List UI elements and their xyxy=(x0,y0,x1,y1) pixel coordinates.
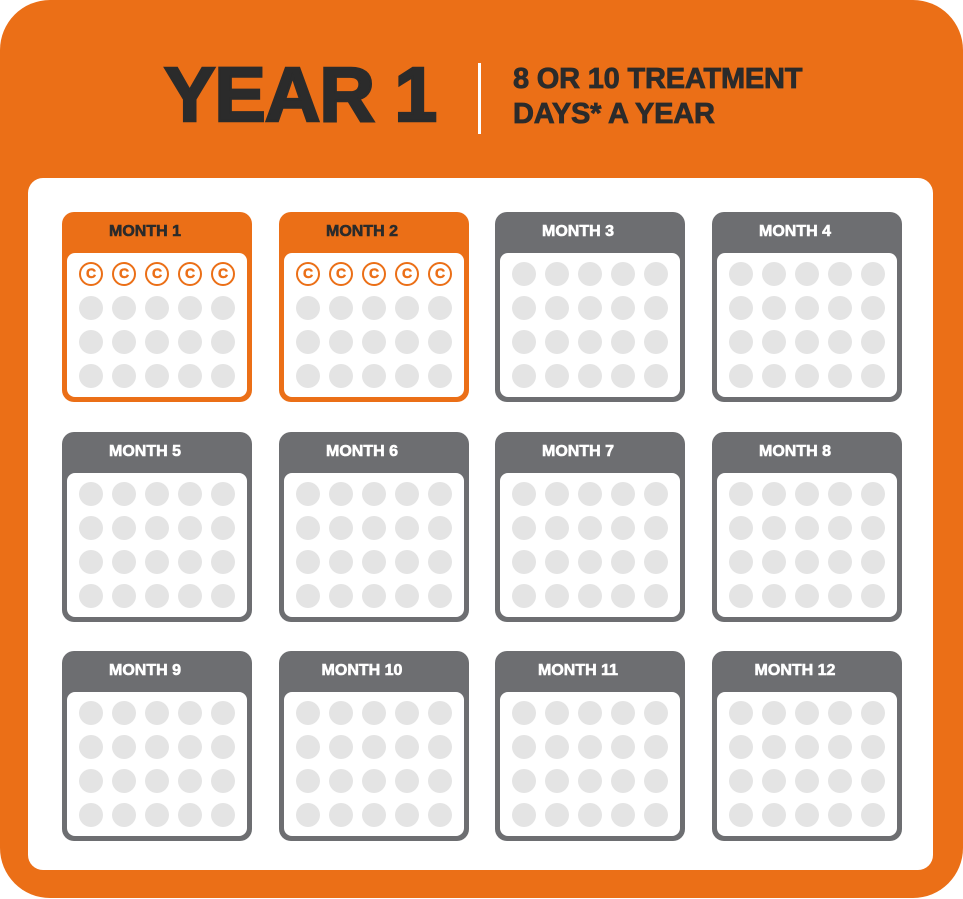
month 3 xyxy=(495,212,685,402)
month 9 xyxy=(62,651,252,841)
subtitle xyxy=(513,63,803,130)
month 2: C xyxy=(369,265,379,281)
month 10 xyxy=(279,651,469,841)
subtitle: DAYS* A YEAR xyxy=(513,98,715,130)
divider xyxy=(478,63,481,134)
month 11 xyxy=(495,651,685,841)
month 4 xyxy=(712,212,902,402)
month 2: MONTH 2 xyxy=(326,223,398,240)
month 2: C xyxy=(435,265,445,281)
month 6 xyxy=(279,432,469,622)
month 5 xyxy=(62,432,252,622)
month 2: C xyxy=(303,265,313,281)
month 4: MONTH 4 xyxy=(759,223,831,240)
month 6: MONTH 6 xyxy=(326,443,398,460)
month 8 xyxy=(712,432,902,622)
month 1: C xyxy=(185,265,195,281)
month 1 xyxy=(62,212,252,402)
month 7 xyxy=(495,432,685,622)
panel: calendar area xyxy=(28,178,933,870)
month 3: MONTH 3 xyxy=(542,223,614,240)
month 1: C xyxy=(218,265,228,281)
month 9: MONTH 9 xyxy=(109,662,181,679)
month 2 xyxy=(279,212,469,402)
month 8: MONTH 8 xyxy=(759,443,831,460)
month 2: C xyxy=(402,265,412,281)
subtitle: 8 OR 10 TREATMENT xyxy=(513,63,802,95)
month 1: C xyxy=(119,265,129,281)
month 5: MONTH 5 xyxy=(109,443,181,460)
title: YEAR 1: YEAR 1 xyxy=(164,52,436,138)
month 12: MONTH 12 xyxy=(755,662,835,679)
month 1: C xyxy=(86,265,96,281)
month 11: MONTH 11 xyxy=(538,662,618,679)
month 1: MONTH 1 xyxy=(109,223,181,240)
month 1: C xyxy=(152,265,162,281)
month 7: MONTH 7 xyxy=(542,443,614,460)
month 12 xyxy=(712,651,902,841)
month 10: MONTH 10 xyxy=(322,662,402,679)
month 2: C xyxy=(336,265,346,281)
